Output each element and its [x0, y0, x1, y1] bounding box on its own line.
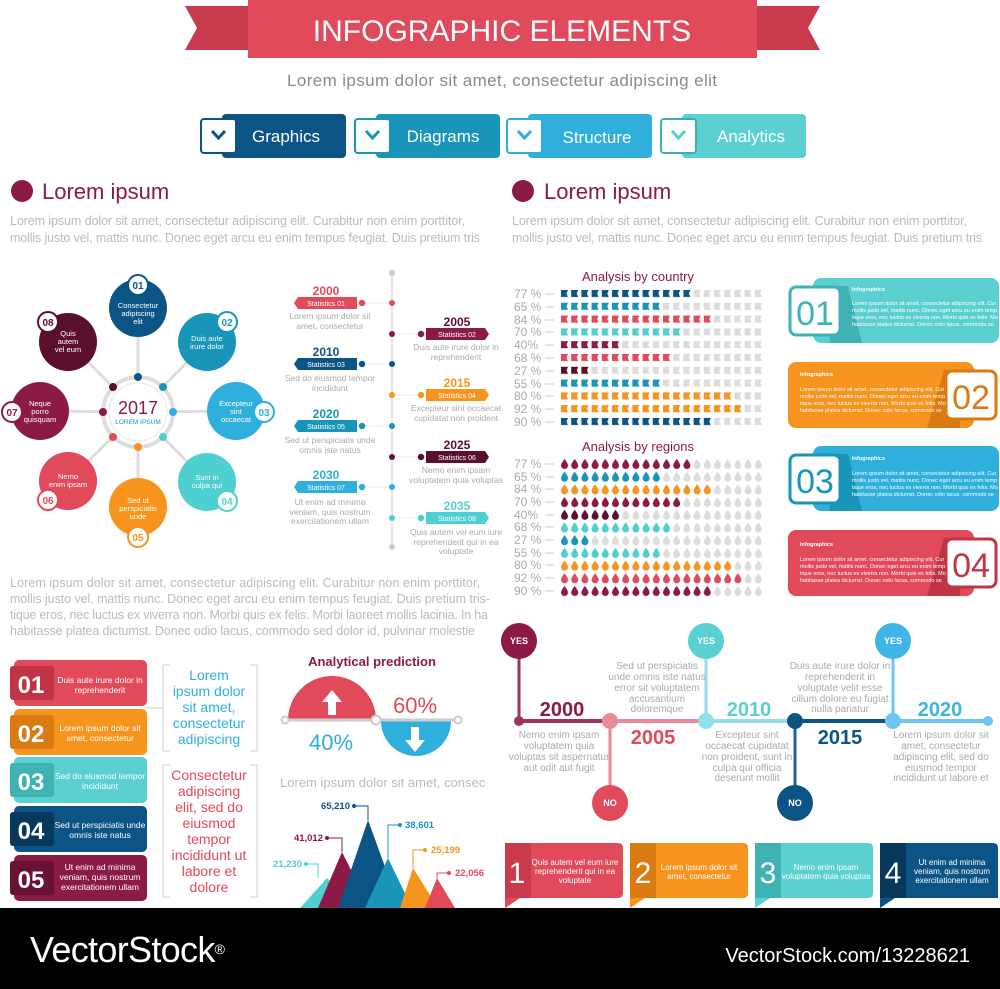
chart: analysis by country: 77 % — [514, 287, 542, 301]
node 05: Sed ut — [127, 496, 150, 505]
paragraph left: Lorem ipsum dolor sit amet, consectetur adipiscing elit. Curabitur non enim porttitor, — [10, 214, 465, 228]
item 2000 — [289, 284, 395, 331]
chart: analysis by country: 27 % — [514, 364, 542, 378]
item 2025: Nemo enim ipsam — [422, 465, 490, 475]
item 2000: amet, consectetur — [296, 321, 364, 331]
bracket text red: labore et — [182, 863, 236, 879]
chart: analysis by regions: 27 % — [514, 533, 542, 547]
card 01: habitasse platea dictumst. Donec odio lacus, commodo se — [852, 322, 994, 328]
horizontal yes/no timeline: amet, consectetur — [901, 741, 981, 752]
circle diagram — [2, 275, 274, 547]
mountain chart — [273, 775, 486, 908]
item 2000: Statistics 01 — [307, 301, 345, 308]
analytical prediction: 60% — [393, 693, 437, 718]
card 3: 3 — [760, 857, 776, 890]
card 03 — [790, 446, 999, 511]
card 1: reprehenderit qui in ea — [535, 867, 616, 876]
item 2015: 2015 — [444, 376, 471, 390]
node 02: Duis aute — [191, 334, 223, 343]
card 1: 1 — [509, 857, 525, 890]
node 04: culpa qui — [192, 481, 222, 490]
item 02: 02 — [18, 721, 44, 748]
horizontal yes/no timeline: culpa qui officia — [713, 763, 782, 774]
horizontal yes/no timeline: Duis aute irure dolor in — [790, 661, 890, 672]
analytical prediction: 40% — [309, 730, 353, 755]
paragraph left: mollis justo vel, mattis nunc. Donec eget arcu eu enim tempus feugiat. Duis pretium tris — [10, 231, 480, 245]
horizontal yes/no timeline: 2005 — [631, 727, 675, 749]
bracket text red — [163, 765, 257, 897]
card 02: mollis justo vel, mattis nunc. Donec eget arcu eu enim temp — [800, 394, 945, 400]
node 02: 02 — [221, 318, 233, 329]
item 2030: 2030 — [313, 468, 340, 482]
node 07: Neque — [29, 399, 51, 408]
item 04: omnis iste natus — [69, 830, 131, 840]
horizontal yes/no timeline: deserunt mollit — [714, 773, 780, 784]
bracket text blue: sit amet, — [183, 699, 235, 715]
card 04: habitasse platea dictumst. Donec odio lacus, commodo se — [800, 578, 942, 584]
chart: analysis by regions — [514, 439, 764, 598]
node 05: 05 — [132, 533, 144, 544]
chart: analysis by regions: 80 % — [514, 558, 542, 572]
horizontal yes/no timeline: incididunt ut labore et — [893, 773, 989, 784]
chart: analysis by regions: 68 % — [514, 520, 542, 534]
card 01: Infographics — [852, 287, 885, 293]
numbered cards right — [788, 278, 999, 596]
vertical timeline — [285, 270, 503, 556]
node 04 — [178, 453, 237, 511]
yes/no badges: YES — [884, 636, 902, 646]
bracket text blue: Lorem — [189, 667, 229, 683]
item 2005: Statistics 02 — [438, 332, 476, 339]
node 08: 08 — [42, 318, 54, 329]
horizontal yes/no timeline: eiusmod tempor — [905, 763, 978, 774]
mountain chart: 22,056 — [455, 868, 484, 879]
card 03: mollis justo vel, mattis nunc. Donec eget arcu eu enim temp — [852, 478, 997, 484]
card 04: tique eros, nec luctus ex viverra non. Morbi quis ex felis. Mo — [800, 571, 946, 577]
item 2005 — [389, 315, 499, 362]
horizontal yes/no timeline: aut odit aut fugit — [523, 763, 595, 774]
heading right: Lorem ipsum — [544, 179, 671, 204]
card 1: Quis autem vel eum iure — [532, 858, 619, 867]
node 07: quisquam — [24, 415, 56, 424]
chart: analysis by country — [514, 269, 764, 430]
card 01: 01 — [796, 295, 834, 333]
chart: analysis by country: 40% — [514, 338, 538, 352]
tab: Diagrams — [355, 114, 500, 158]
chart: analysis by regions: 40% — [514, 508, 538, 522]
icon: up arrow — [322, 690, 342, 715]
item 2010: 2010 — [313, 345, 340, 359]
item 2030: exercitationem ullam — [291, 516, 369, 526]
horizontal yes/no timeline: occaecat cupidatat — [705, 741, 789, 752]
node 01: Consectetur — [118, 301, 159, 310]
chart: analysis by country: 55 % — [514, 377, 542, 391]
paragraph middle left: Lorem ipsum dolor sit amet, consectetur adipiscing elit. Curabitur non enim porttitor, — [10, 576, 480, 590]
mountain chart: 38,601 — [405, 820, 435, 831]
item 2015 — [389, 376, 502, 423]
card 2 — [630, 843, 748, 908]
item 2020 — [285, 407, 395, 455]
chart: analysis by regions: 92 % — [514, 571, 542, 585]
chart: analysis by country: 65 % — [514, 300, 542, 314]
horizontal yes/no timeline: doloremque — [631, 704, 684, 715]
item 2025: Statistics 06 — [438, 455, 476, 462]
card 2: amet, consectetur — [667, 872, 731, 881]
card 04: Infographics — [800, 542, 833, 548]
tab: Structure: Structure — [563, 128, 631, 147]
item 2010: Statistics 03 — [307, 362, 345, 369]
node 03 — [207, 382, 274, 440]
paragraph middle left: habitasse platea dictumst. Donec odio lacus, commodo sed dolor id, pulvinar molestie — [10, 624, 475, 638]
item 05 — [10, 855, 147, 901]
analytical prediction — [282, 654, 462, 756]
horizontal yes/no timeline: 2020 — [918, 699, 962, 721]
chart: analysis by regions: 65 % — [514, 470, 542, 484]
card 1: voluptate — [559, 876, 592, 885]
node 08 — [38, 312, 97, 371]
item 2010 — [285, 345, 395, 393]
horizontal yes/no timeline: Nemo enim ipsam — [519, 730, 599, 741]
footer — [0, 908, 1000, 989]
item 01: 01 — [18, 672, 44, 699]
heading left: Lorem ipsum — [42, 179, 169, 204]
item 2035: voluptate — [439, 546, 474, 556]
node 05: perspiciatis — [119, 504, 157, 513]
bracket text red: tempor — [187, 831, 231, 847]
card 03: Lorem ipsum dolor sit amet, consectetur adipiscing elit. Cur — [852, 471, 996, 477]
tab: Graphics — [201, 114, 346, 158]
item 2035: reprehenderit qui in ea — [413, 537, 499, 547]
yes/no badges: YES — [510, 636, 528, 646]
node 06: enim ipsam — [49, 480, 87, 489]
chart: analysis by country: 90 % — [514, 415, 542, 429]
node 06: Nemo — [58, 472, 78, 481]
card 3: Nemo enim ipsam — [794, 863, 859, 872]
bracket text blue: adipiscing — [178, 731, 240, 747]
node 03: Excepteur — [219, 399, 253, 408]
card 02: Lorem ipsum dolor sit amet, consectetur adipiscing elit. Cur — [800, 387, 944, 393]
card 01 — [790, 278, 999, 343]
horizontal yes/no timeline: accusantium — [629, 694, 685, 705]
paragraph middle left: mollis justo vel, mattis nunc. Donec eget arcu eu enim tempus feugiat. Duis pretium tris- — [10, 592, 490, 606]
card 04: Lorem ipsum dolor sit amet, consectetur adipiscing elit. Cur — [800, 557, 944, 563]
horizontal yes/no timeline: 2010 — [727, 699, 771, 721]
node 01: elit — [133, 317, 144, 326]
tab: Analytics: Analytics — [717, 127, 785, 146]
mountain chart: 21,230 — [273, 859, 302, 870]
title ribbon — [185, 0, 820, 58]
card 2: Lorem ipsum dolor sit — [661, 863, 738, 872]
tab: Analytics — [661, 114, 806, 158]
card 04 — [788, 530, 996, 596]
horizontal yes/no timeline — [501, 623, 993, 821]
mountain chart: 25,199 — [431, 845, 460, 856]
yes/no badges: YES — [697, 636, 715, 646]
item 01: reprehenderit — [75, 685, 126, 695]
chart: analysis by regions: 84 % — [514, 482, 542, 496]
tab: Structure — [507, 114, 652, 158]
circle diagram: LOREM IPSUM — [115, 419, 161, 426]
card 2: 2 — [635, 857, 651, 890]
item 2025: voluptatem quia voluptas — [409, 475, 503, 485]
card 4: exercitationem ullam — [915, 876, 989, 885]
node 01: adipiscing — [121, 309, 155, 318]
paragraph right: mollis justo vel, mattis nunc. Donec eget arcu eu enim tempus feugiat. Duis pretium tris — [512, 231, 982, 245]
item 2005: reprehenderit — [431, 352, 482, 362]
item 2010: Sed do eiusmod tempor — [285, 373, 375, 383]
card 01: tique eros, nec luctus ex viverra non. Morbi quis ex felis. Mo — [852, 315, 998, 321]
card 4: veniam, quis nostrum — [914, 867, 990, 876]
item 2035: Statistics 08 — [438, 516, 476, 523]
horizontal yes/no timeline: error sit voluptatem — [614, 683, 700, 694]
item 2035 — [389, 499, 502, 556]
card 04: 04 — [952, 547, 990, 585]
card 03: Infographics — [852, 456, 885, 462]
node 08: vel eum — [55, 345, 81, 354]
item 05: veniam, quis nostrum — [60, 872, 140, 882]
card 4: 4 — [885, 857, 901, 890]
chart: analysis by regions: Analysis by regions — [582, 439, 694, 454]
card 03: tique eros, nec luctus ex viverra non. Morbi quis ex felis. Mo — [852, 485, 998, 491]
bracket text red: dolore — [190, 879, 229, 895]
node 04: 04 — [221, 497, 233, 508]
bracket text red: incididunt ut — [172, 847, 246, 863]
item 03: 03 — [18, 769, 44, 796]
tab: Graphics: Graphics — [252, 127, 320, 146]
card 02: Infographics — [800, 372, 833, 378]
chart: analysis by country: 80 % — [514, 389, 542, 403]
chart: analysis by country: 92 % — [514, 402, 542, 416]
item 02: Lorem ipsum dolor sit — [59, 723, 141, 733]
item 02 — [10, 709, 147, 755]
horizontal yes/no timeline: voluptate velit esse — [797, 683, 883, 694]
paragraph right: Lorem ipsum dolor sit amet, consectetur adipiscing elit. Curabitur non enim porttitor, — [512, 214, 967, 228]
item 04 — [10, 806, 147, 852]
bracket text red: adipiscing — [178, 783, 240, 799]
bracket text red: elit, sed do — [175, 799, 243, 815]
footer: VectorStock.com/13228621 — [725, 945, 970, 967]
item 05: exercitationem ullam — [61, 882, 139, 892]
horizontal yes/no timeline: cillum dolore eu fugiat — [791, 694, 889, 705]
item 01: Duis aute irure dolor in — [57, 675, 143, 685]
paragraph right — [512, 214, 982, 245]
footer: VectorStock® — [30, 929, 226, 970]
item 2000: Lorem ipsum dolor sit — [289, 311, 371, 321]
item 2030: Ut enim ad minima — [295, 497, 366, 507]
card 4 — [880, 843, 998, 908]
yes/no badges: NO — [788, 798, 802, 808]
horizontal yes/no timeline: Sed ut perspiciatis — [616, 661, 698, 672]
yes/no badges — [501, 623, 911, 821]
bracket text blue: ipsum dolor — [173, 683, 246, 699]
horizontal yes/no timeline: unde omnis iste natus — [608, 672, 706, 683]
item 2020: Statistics 05 — [307, 424, 345, 431]
node 01: 01 — [132, 281, 144, 292]
item 03: Sed do eiusmod tempor — [55, 771, 145, 781]
tab: Diagrams: Diagrams — [407, 127, 479, 146]
mountain chart: 41,012 — [294, 833, 323, 844]
item 2010: incididunt — [312, 383, 349, 393]
card 02: tique eros, nec luctus ex viverra non. Morbi quis ex felis. Mo — [800, 401, 946, 407]
node 06 — [38, 452, 97, 510]
chart: analysis by country: Analysis by country — [582, 269, 694, 284]
item 2025: 2025 — [444, 438, 471, 452]
node 02 — [178, 312, 237, 371]
chart: analysis by regions: 70 % — [514, 495, 542, 509]
paragraph middle left: tique eros, nec luctus ex viverra non. Morbi quis ex felis. Morbi laoreet mollis lacinia. In ha — [10, 608, 488, 622]
card 01: mollis justo vel, mattis nunc. Donec eget arcu eu enim temp — [852, 308, 997, 314]
card 4: Ut enim ad minima — [919, 858, 986, 867]
horizontal yes/no timeline: Lorem ipsum dolor sit — [893, 730, 989, 741]
item 2035: 2035 — [444, 499, 471, 513]
mountain chart: 65,210 — [321, 801, 350, 812]
card 1 — [505, 843, 623, 908]
node 06: 06 — [42, 496, 54, 507]
item 2005: 2005 — [444, 315, 471, 329]
item 2020: 2020 — [313, 407, 340, 421]
bracket text red: eiusmod — [183, 815, 235, 831]
item 05: 05 — [18, 867, 44, 894]
bracket text red: Consectetur — [171, 767, 247, 783]
horizontal yes/no timeline: reprehenderit in — [805, 672, 875, 683]
node 02: irure dolor — [190, 342, 224, 351]
item 2015: Statistics 04 — [438, 393, 476, 400]
card 04: mollis justo vel, mattis nunc. Donec eget arcu eu enim temp — [800, 564, 945, 570]
chart: analysis by regions: 55 % — [514, 546, 542, 560]
numbered list left — [10, 660, 147, 901]
item 2035: Quis autem vel eum iure — [410, 527, 502, 537]
node 08: Quis — [60, 329, 76, 338]
horizontal yes/no timeline: 2015 — [818, 727, 862, 749]
item 03: incididunt — [82, 781, 119, 791]
node 03: 03 — [258, 408, 270, 419]
item 03 — [10, 757, 147, 803]
chart: analysis by country: 70 % — [514, 325, 542, 339]
item 04: Sed ut perspiciatis unde — [55, 820, 146, 830]
card 01: Lorem ipsum dolor sit amet, consectetur adipiscing elit. Cur — [852, 301, 996, 307]
chart: analysis by regions: 90 % — [514, 584, 542, 598]
subtitle: Lorem ipsum dolor sit amet, consectetur adipiscing elit — [287, 71, 717, 90]
analytical prediction: Analytical prediction — [308, 654, 436, 669]
card 02 — [788, 362, 996, 428]
item 2020: Sed ut perspiciatis unde — [285, 435, 376, 445]
node 03: occaecat — [221, 415, 252, 424]
chart: analysis by country: 84 % — [514, 313, 542, 327]
item 2030: Statistics 07 — [307, 485, 345, 492]
center year: 2017 — [118, 398, 158, 418]
card 3 — [755, 843, 873, 908]
node 07: porro — [31, 407, 49, 416]
horizontal yes/no timeline: non proident, sunt in — [702, 752, 792, 763]
card 03: habitasse platea dictumst. Donec odio lacus, commodo se — [852, 492, 994, 498]
item 01 — [10, 660, 147, 706]
item 04: 04 — [18, 818, 45, 845]
node 08: autem — [58, 337, 78, 346]
horizontal yes/no timeline: nulla pariatur — [811, 704, 870, 715]
item 2005: Duis aute irure dolor in — [413, 342, 499, 352]
item 02: amet, consectetur — [66, 733, 134, 743]
card 02: 02 — [952, 379, 990, 417]
mountain chart: Lorem ipsum dolor sit amet, consec — [280, 775, 486, 790]
title: INFOGRAPHIC ELEMENTS — [313, 15, 691, 48]
item 2015: Excepteur sint occaecat — [411, 403, 502, 413]
bracket text blue: consectetur — [173, 715, 246, 731]
horizontal yes/no timeline: voluptas sit aspernatur — [509, 752, 610, 763]
node 07 — [2, 382, 69, 440]
horizontal yes/no timeline: Excepteur sint — [715, 730, 779, 741]
item 2025 — [389, 438, 503, 485]
horizontal yes/no timeline: 2000 — [540, 699, 584, 721]
node 01 — [109, 275, 167, 337]
horizontal yes/no timeline: adipiscing elit, sed do — [893, 752, 989, 763]
item 05: Ut enim ad minima — [65, 862, 136, 872]
horizontal yes/no timeline: voluptatem quia — [524, 741, 595, 752]
item 2020: omnis iste natus — [299, 445, 361, 455]
item 2030 — [290, 468, 395, 526]
node 05: unde — [130, 512, 146, 521]
card 3: voluptatem quia voluptas — [782, 872, 870, 881]
paragraph middle left — [10, 576, 490, 638]
node 05 — [109, 478, 167, 547]
chart: analysis by country: 68 % — [514, 351, 542, 365]
bracket text blue — [147, 665, 257, 751]
card 03: 03 — [796, 463, 834, 501]
node 04: Sunt in — [195, 473, 219, 482]
item 2015: cupidatat non proident — [414, 413, 499, 423]
bottom cards — [505, 843, 998, 908]
chart: analysis by regions: 77 % — [514, 457, 542, 471]
node 07: 07 — [6, 408, 18, 419]
tabs — [201, 114, 806, 158]
yes/no badges: NO — [603, 798, 617, 808]
card 02: habitasse platea dictumst. Donec odio lacus, commodo se — [800, 408, 942, 414]
paragraph left — [10, 214, 480, 245]
item 2000: 2000 — [313, 284, 340, 298]
item 2030: veniam, quis nostrum — [290, 507, 370, 517]
icon: down arrow — [405, 727, 425, 752]
node 03: sint — [230, 407, 243, 416]
